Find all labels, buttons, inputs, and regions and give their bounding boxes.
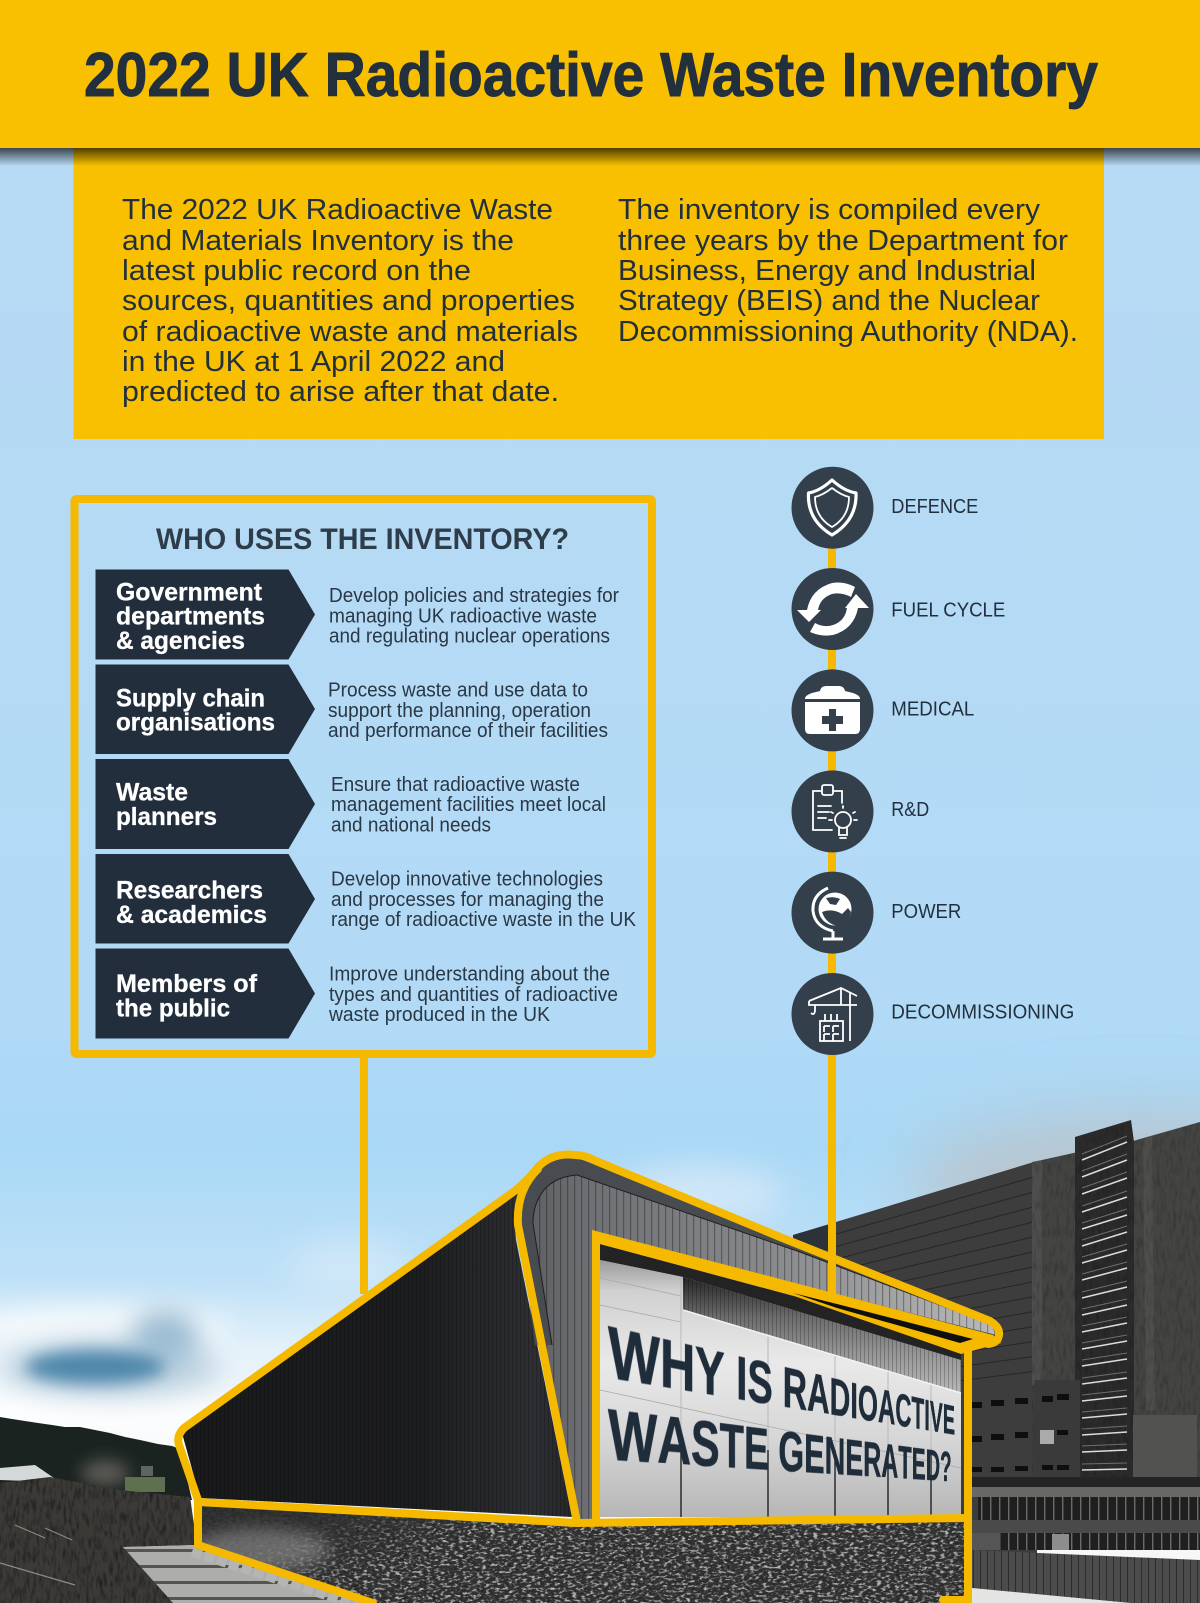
connector: sector icons to building: [828, 548, 836, 1300]
sector: R&D: [792, 770, 929, 852]
row: waste planners: Ensure that radioactive waste: [331, 774, 580, 796]
intro text: right column: The inventory is compiled every: [618, 194, 1041, 226]
row: government departments: and regulating nuclear operations: [329, 626, 610, 648]
intro text: right column: [618, 194, 1078, 348]
intro text: left column: and Materials Inventory is the: [122, 225, 514, 257]
sector: decommissioning: [792, 973, 1074, 1055]
icon: cycle arrows: [797, 582, 869, 636]
foreground building: roof fascia: [520, 1157, 996, 1520]
intro text: left column: of radioactive waste and materials: [122, 316, 578, 348]
intro text: right column: three years by the Department for: [618, 225, 1069, 257]
sector: medical: [792, 669, 974, 751]
row: government departments: departments: [116, 603, 265, 631]
sector: power: POWER: [891, 900, 961, 923]
row: researchers: Develop innovative technologies: [331, 869, 603, 891]
row: researchers: range of radioactive waste in the UK: [331, 909, 637, 931]
icon: clipboard and bulb: [813, 785, 857, 838]
row: waste planners: Waste: [116, 779, 188, 807]
background: access steps: [123, 1545, 373, 1603]
intro text: right column: Strategy (BEIS) and the Nuclear: [618, 285, 1041, 317]
foreground building: front façade: [600, 1244, 961, 1517]
row: waste planners: and national needs: [331, 814, 491, 836]
row: researchers: [96, 854, 637, 944]
row: supply chain: and performance of their facilities: [328, 720, 608, 742]
row: members of the public: Improve understanding about the: [329, 964, 610, 986]
intro text: left column: sources, quantities and properties: [122, 285, 575, 317]
header band: [0, 0, 1200, 148]
foreground building: yellow outline: [178, 1154, 1001, 1603]
sector: decommissioning: DECOMMISSIONING: [891, 1001, 1074, 1024]
sector: R&D: R&D: [891, 798, 929, 821]
sector: fuel cycle: [792, 568, 1005, 650]
intro text: left column: in the UK at 1 April 2022 and: [122, 346, 505, 378]
icon: medical case: [805, 686, 860, 734]
panel: introduction: [74, 148, 1104, 439]
row: supply chain: Process waste and use data to: [328, 680, 588, 702]
row: researchers: and processes for managing the: [331, 889, 604, 911]
row: supply chain: Supply chain: [116, 684, 265, 712]
intro text: left column: [122, 194, 578, 408]
row: members of the public: waste produced in the UK: [328, 1004, 551, 1026]
foreground building: dark curved side: [182, 1186, 572, 1517]
row: researchers: Researchers: [116, 876, 263, 904]
row: members of the public: Members of: [116, 970, 258, 998]
sector: fuel cycle: FUEL CYCLE: [891, 598, 1005, 622]
intro text: left column: The 2022 UK Radioactive Waste: [122, 194, 553, 226]
row: members of the public: [96, 948, 618, 1038]
row: waste planners: [96, 759, 606, 849]
foreground building: brick plinth: [190, 1500, 971, 1603]
sector: defence: DEFENCE: [891, 495, 978, 518]
row: government departments: managing UK radioactive waste: [329, 605, 597, 627]
intro text: right column: Business, Energy and Industrial: [618, 255, 1036, 287]
intro text: left column: predicted to arise after that date.: [122, 376, 559, 408]
intro text: left column: latest public record on the: [122, 255, 471, 287]
sector: power: [792, 872, 961, 954]
row: government departments: [96, 570, 619, 660]
row: waste planners: planners: [116, 803, 217, 831]
row: members of the public: types and quantities of radioactive: [329, 984, 618, 1006]
row: government departments: Government: [116, 578, 263, 606]
sector: defence: [792, 467, 978, 549]
heading: who uses: WHO USES THE INVENTORY?: [156, 523, 569, 556]
title: 2022 UK Radioactive Waste Inventory: [84, 41, 1098, 110]
panel: who uses the inventory: [74, 499, 652, 1054]
row: government departments: Develop policies and strategies for: [329, 585, 619, 607]
building sign text: WASTE GENERATED?: [608, 1394, 951, 1491]
sector: medical: MEDICAL: [891, 698, 974, 721]
icon: shield: [808, 480, 856, 535]
row: waste planners: management facilities meet local: [331, 794, 606, 816]
row: supply chain: organisations: [116, 709, 275, 737]
building sign text: WHY IS RADIOACTIVE: [608, 1311, 955, 1444]
background: distant hill and trees: [0, 1417, 192, 1500]
row: supply chain: support the planning, operation: [328, 700, 591, 722]
row: supply chain: [96, 664, 608, 754]
background: large reactor building: [793, 1115, 1200, 1603]
row: government departments: & agencies: [116, 627, 245, 655]
row: members of the public: the public: [116, 994, 230, 1022]
header shadow: [0, 148, 1200, 166]
connector: inventory box to building: [360, 1058, 368, 1294]
intro text: right column: Decommissioning Authority (NDA).: [618, 316, 1078, 348]
icon: globe: [813, 888, 852, 939]
background: rough ground: [0, 1477, 200, 1603]
icon: crane and building: [809, 988, 857, 1041]
row: researchers: & academics: [116, 901, 267, 929]
